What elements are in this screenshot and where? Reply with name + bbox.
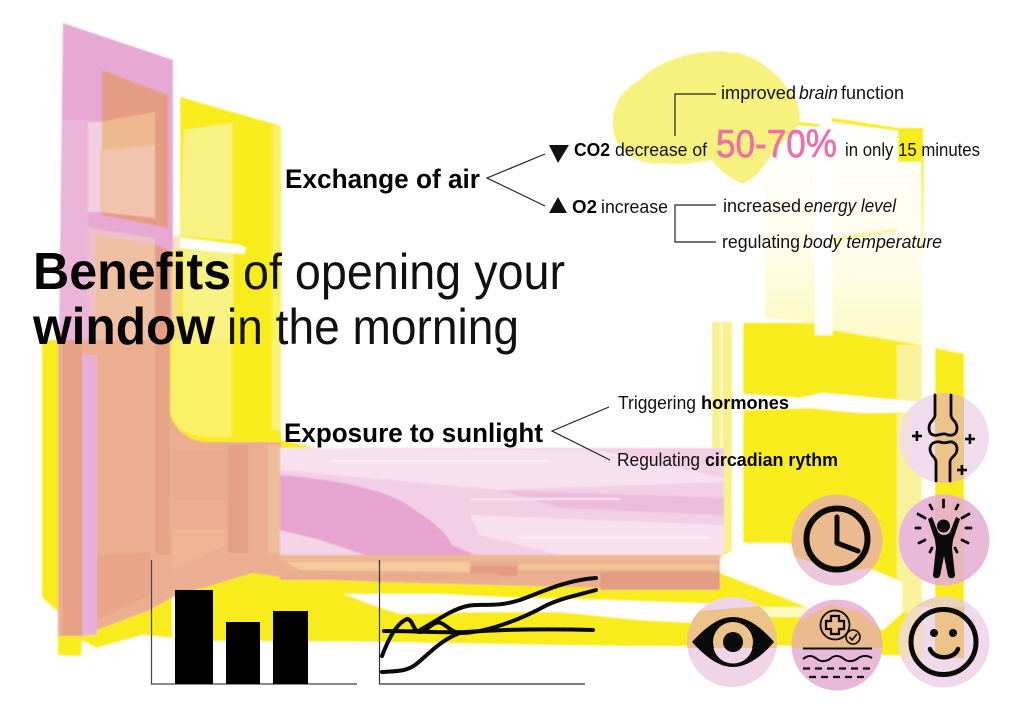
section: exposure to sunlight bbox=[284, 393, 838, 470]
regulating circadian rythm: circadian rythm bbox=[705, 450, 838, 470]
orange door panel top bbox=[102, 70, 168, 228]
title: of opening your bbox=[243, 244, 565, 300]
triggering hormones: hormones bbox=[701, 393, 789, 413]
bed bbox=[280, 448, 724, 555]
icon: eye bbox=[687, 597, 777, 687]
icon: joint bones bbox=[899, 393, 989, 483]
title: in the morning bbox=[227, 299, 519, 355]
heading: exchange of air: Exchange of air bbox=[285, 164, 480, 194]
regulating body temperature: body temperature bbox=[803, 232, 942, 252]
pink door bbox=[59, 23, 173, 340]
heading: exposure to sunlight: Exposure to sunlight bbox=[284, 418, 543, 448]
white floor stripe bbox=[344, 594, 735, 625]
CO2 line: decrease of bbox=[615, 140, 708, 160]
CO2 line: CO2 bbox=[574, 140, 610, 160]
white floor below bbox=[97, 635, 720, 700]
bar chart bbox=[152, 560, 357, 684]
bracket: brain bbox=[675, 94, 716, 136]
regulating circadian rythm: Regulating bbox=[617, 450, 700, 470]
increased energy level bbox=[723, 196, 897, 216]
lower yellow door part bbox=[168, 340, 281, 443]
improved brain function: improved bbox=[721, 83, 796, 103]
improved brain function bbox=[721, 83, 904, 103]
icon: clock bbox=[792, 494, 882, 586]
regulating circadian rythm bbox=[617, 450, 838, 470]
CO2 line bbox=[574, 123, 980, 166]
yellow door bbox=[172, 97, 281, 340]
O2 line: increase bbox=[601, 197, 668, 217]
section: exchange of air bbox=[285, 83, 980, 252]
O2 line: O2 bbox=[572, 197, 597, 217]
O2 line bbox=[572, 197, 668, 217]
bed base bands bbox=[280, 555, 720, 561]
right window yellow block bbox=[743, 323, 920, 548]
bracket: oxygen effects bbox=[675, 205, 716, 242]
increased energy level: energy level bbox=[804, 196, 897, 216]
CO2 line: in only 15 minutes bbox=[845, 140, 980, 160]
icon: smiley bbox=[898, 596, 990, 688]
icon: skin health bbox=[790, 598, 885, 693]
title: Benefits bbox=[33, 243, 231, 301]
icon: down triangle bbox=[549, 145, 569, 163]
floor and lower wall yellow bbox=[42, 340, 935, 656]
increased energy level: increased bbox=[723, 196, 801, 216]
triggering hormones: Triggering bbox=[618, 393, 696, 413]
regulating body temperature: regulating bbox=[722, 232, 800, 252]
orange lower door and wall bbox=[58, 340, 720, 636]
regulating body temperature bbox=[722, 232, 942, 252]
branch connector bbox=[552, 407, 610, 460]
title bbox=[32, 243, 565, 356]
improved brain function: function bbox=[841, 83, 904, 103]
icon: up triangle bbox=[549, 197, 567, 213]
lower door panel bbox=[88, 228, 155, 340]
pale upper right window bbox=[765, 125, 815, 323]
triggering hormones bbox=[618, 393, 789, 413]
CO2 line: 50-70% bbox=[716, 123, 837, 166]
line chart bbox=[380, 560, 596, 684]
brain silhouette bbox=[613, 51, 800, 184]
improved brain function: brain bbox=[799, 83, 838, 103]
branch connector bbox=[487, 154, 545, 206]
white highlights on right bbox=[743, 393, 920, 413]
icon: energetic person bbox=[898, 494, 990, 586]
title: window bbox=[32, 298, 216, 356]
